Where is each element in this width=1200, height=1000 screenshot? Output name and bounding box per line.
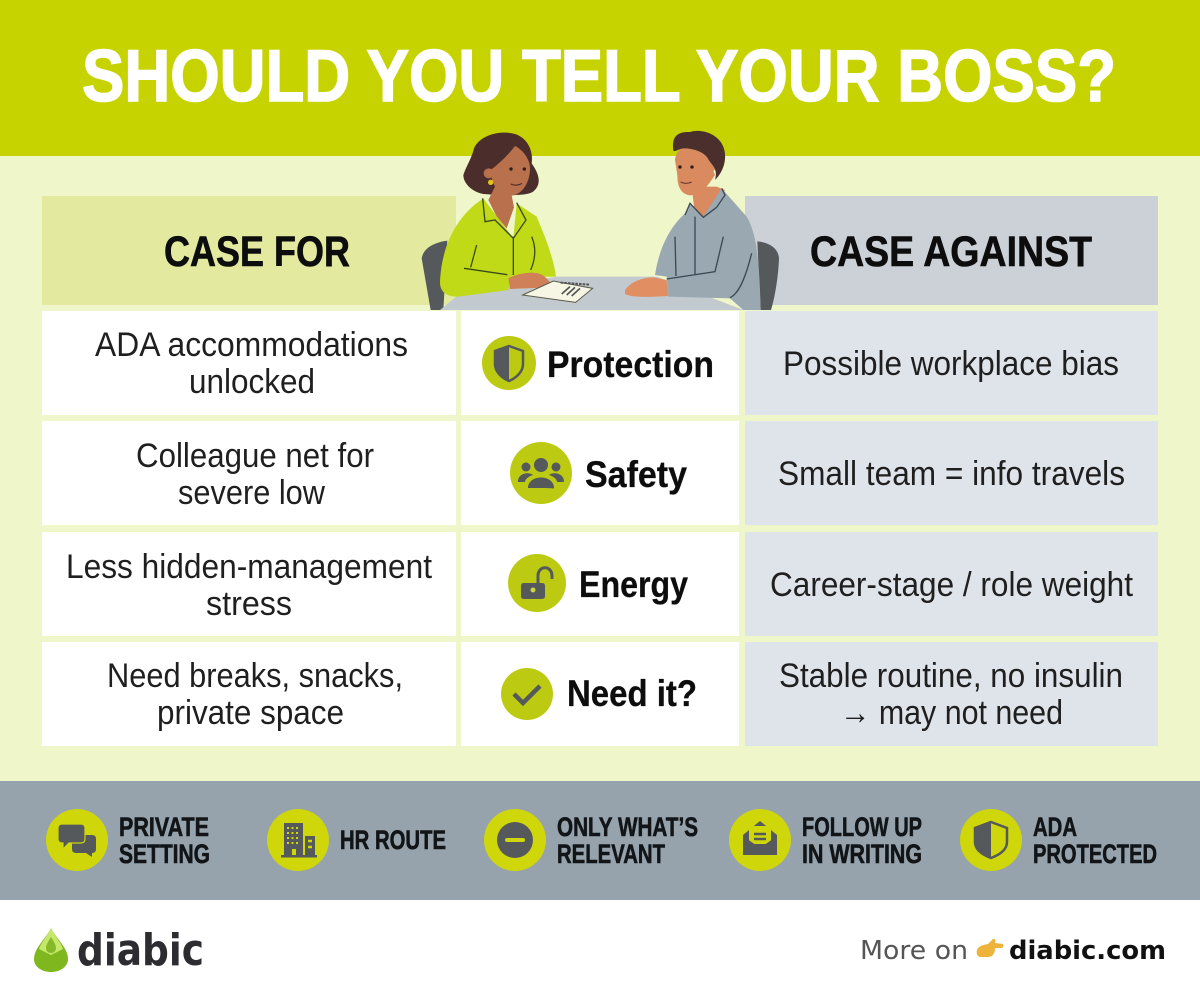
icon: pointing hand bbox=[977, 939, 1003, 957]
tip: ADA protected: PROTECTED bbox=[1033, 839, 1157, 869]
panel: case against rows: → may not need bbox=[840, 694, 1063, 732]
icon: group of people bbox=[510, 442, 572, 504]
logo: diabic: diabic bbox=[77, 925, 204, 976]
panel: middle column themes: Need it? bbox=[567, 673, 697, 714]
footer tips bar bbox=[0, 781, 1200, 900]
panel: middle column themes bbox=[461, 311, 739, 746]
tip: private setting: PRIVATE bbox=[119, 812, 209, 842]
icon: check mark bbox=[501, 668, 553, 720]
panel: case for rows: severe low bbox=[178, 474, 325, 512]
panel: case against rows bbox=[745, 311, 1158, 746]
tip: ADA protected bbox=[960, 809, 1157, 871]
panel: case for heading: CASE FOR bbox=[164, 228, 350, 276]
panel: case for rows: Need breaks, snacks, bbox=[107, 657, 403, 695]
panel: case for rows bbox=[42, 311, 456, 746]
tip: only what's relevant: ONLY WHAT’S bbox=[557, 812, 698, 842]
illustration: woman and man at table bbox=[422, 131, 779, 310]
panel: case for rows: Less hidden-management bbox=[66, 548, 433, 586]
link: more on diabic.com: More on bbox=[860, 936, 968, 966]
tip: only what's relevant: RELEVANT bbox=[557, 839, 665, 869]
notepad bbox=[523, 281, 593, 302]
panel: case against rows: Stable routine, no insulin bbox=[779, 657, 1123, 695]
panel: case against rows: Possible workplace bias bbox=[783, 345, 1119, 383]
panel: case for rows: stress bbox=[206, 585, 292, 623]
logo: diabic bbox=[34, 925, 204, 976]
man bbox=[625, 131, 761, 310]
panel: case for heading bbox=[42, 196, 456, 305]
panel: case against rows: Small team = info travels bbox=[778, 455, 1125, 493]
panel: middle column themes: Protection bbox=[547, 344, 714, 385]
panel: case for rows: private space bbox=[157, 694, 344, 732]
footer strip bbox=[0, 900, 1200, 1000]
tip: follow up in writing: IN WRITING bbox=[802, 839, 922, 869]
tip: ADA protected: ADA bbox=[1033, 812, 1077, 842]
tip: HR route bbox=[267, 809, 446, 871]
icon: open padlock bbox=[508, 554, 566, 612]
panel: case against heading bbox=[745, 196, 1158, 305]
tip: private setting bbox=[46, 809, 210, 871]
panel: middle column themes: Safety bbox=[585, 454, 687, 495]
woman bbox=[440, 133, 556, 297]
link: more on diabic.com bbox=[860, 936, 1166, 966]
panel: middle column themes: Energy bbox=[579, 564, 688, 605]
panel: case against rows: Career-stage / role weight bbox=[770, 566, 1134, 604]
icon: shield bbox=[482, 336, 536, 390]
tip: HR route: HR ROUTE bbox=[340, 825, 446, 855]
panel: case for rows: unlocked bbox=[189, 363, 315, 401]
table rows bbox=[42, 311, 1158, 746]
tip: only what's relevant bbox=[484, 809, 698, 871]
header banner bbox=[0, 0, 1200, 156]
panel: case for rows: Colleague net for bbox=[136, 437, 374, 475]
tip: follow up in writing: FOLLOW UP bbox=[802, 812, 922, 842]
panel: case for rows: ADA accommodations bbox=[95, 326, 408, 364]
panel: case against heading: CASE AGAINST bbox=[810, 228, 1092, 276]
tip: private setting: SETTING bbox=[119, 839, 210, 869]
link: more on diabic.com: diabic.com bbox=[1009, 936, 1166, 966]
tip: follow up in writing bbox=[729, 809, 922, 871]
